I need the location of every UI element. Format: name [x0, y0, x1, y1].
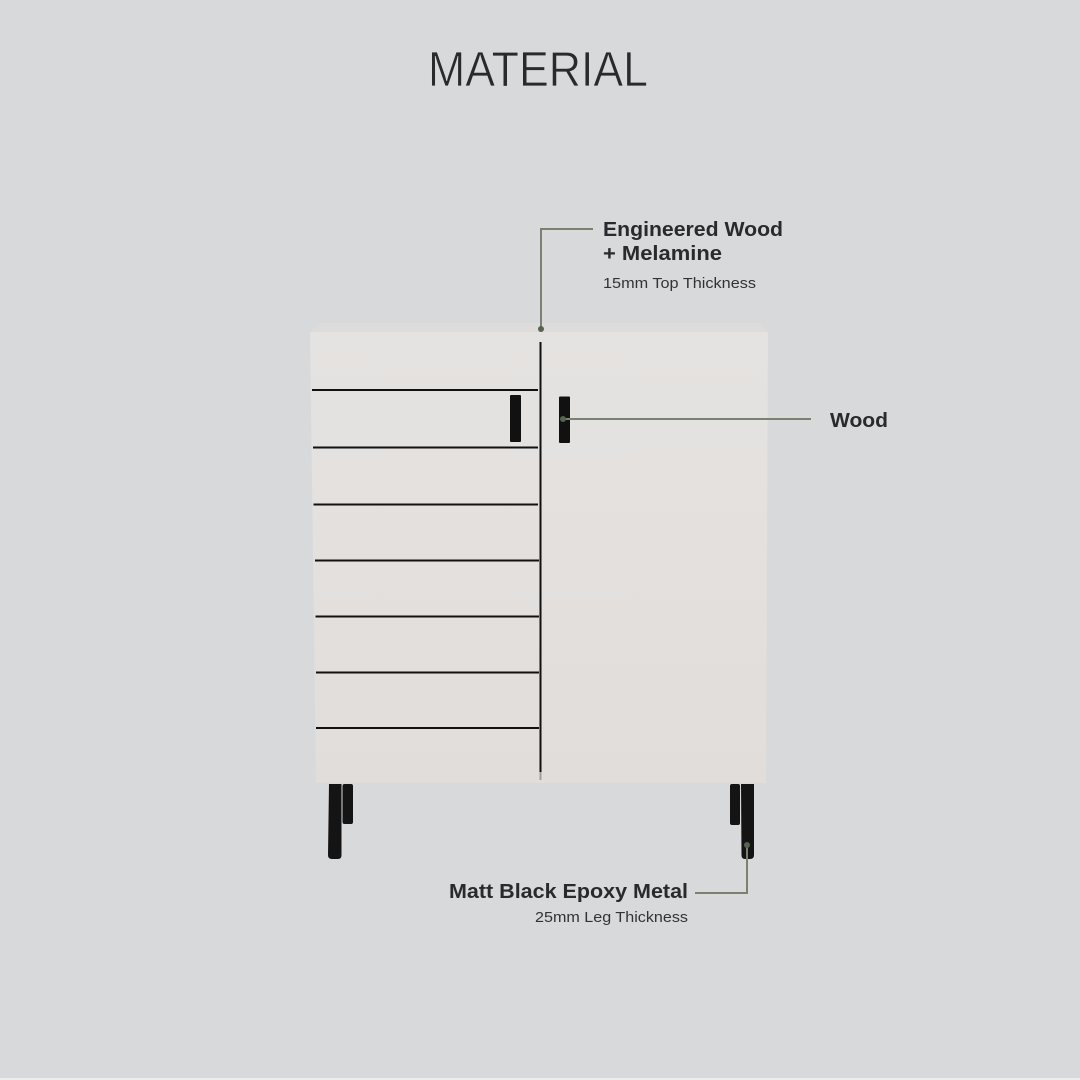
callout heading: Matt Black Epoxy Metal	[449, 880, 688, 903]
right door handle	[559, 396, 570, 443]
leader line	[563, 418, 811, 420]
callout: engineered wood	[538, 218, 783, 332]
centre gap lower end	[540, 772, 542, 780]
left door panel lines	[312, 390, 539, 728]
leader line	[695, 845, 747, 893]
marker dot	[744, 842, 750, 848]
centre door gap	[540, 342, 542, 772]
leader line	[541, 229, 593, 329]
callout detail: 15mm Top Thickness	[603, 275, 756, 292]
callout heading: Wood	[830, 409, 888, 432]
callout detail: 25mm Leg Thickness	[535, 909, 688, 926]
left door handle	[510, 395, 521, 442]
callout: wood	[560, 409, 888, 432]
cabinet top surface	[310, 323, 768, 332]
cabinet	[310, 323, 768, 859]
callout: matt black epoxy metal	[449, 842, 750, 926]
right legs	[730, 784, 754, 859]
marker dot	[538, 326, 544, 332]
cabinet front	[310, 332, 768, 783]
callout heading: Engineered Wood	[603, 218, 783, 241]
marker dot	[560, 416, 566, 422]
title: MATERIAL	[428, 43, 648, 97]
left legs	[328, 784, 353, 859]
callout heading second line: + Melamine	[603, 242, 722, 265]
